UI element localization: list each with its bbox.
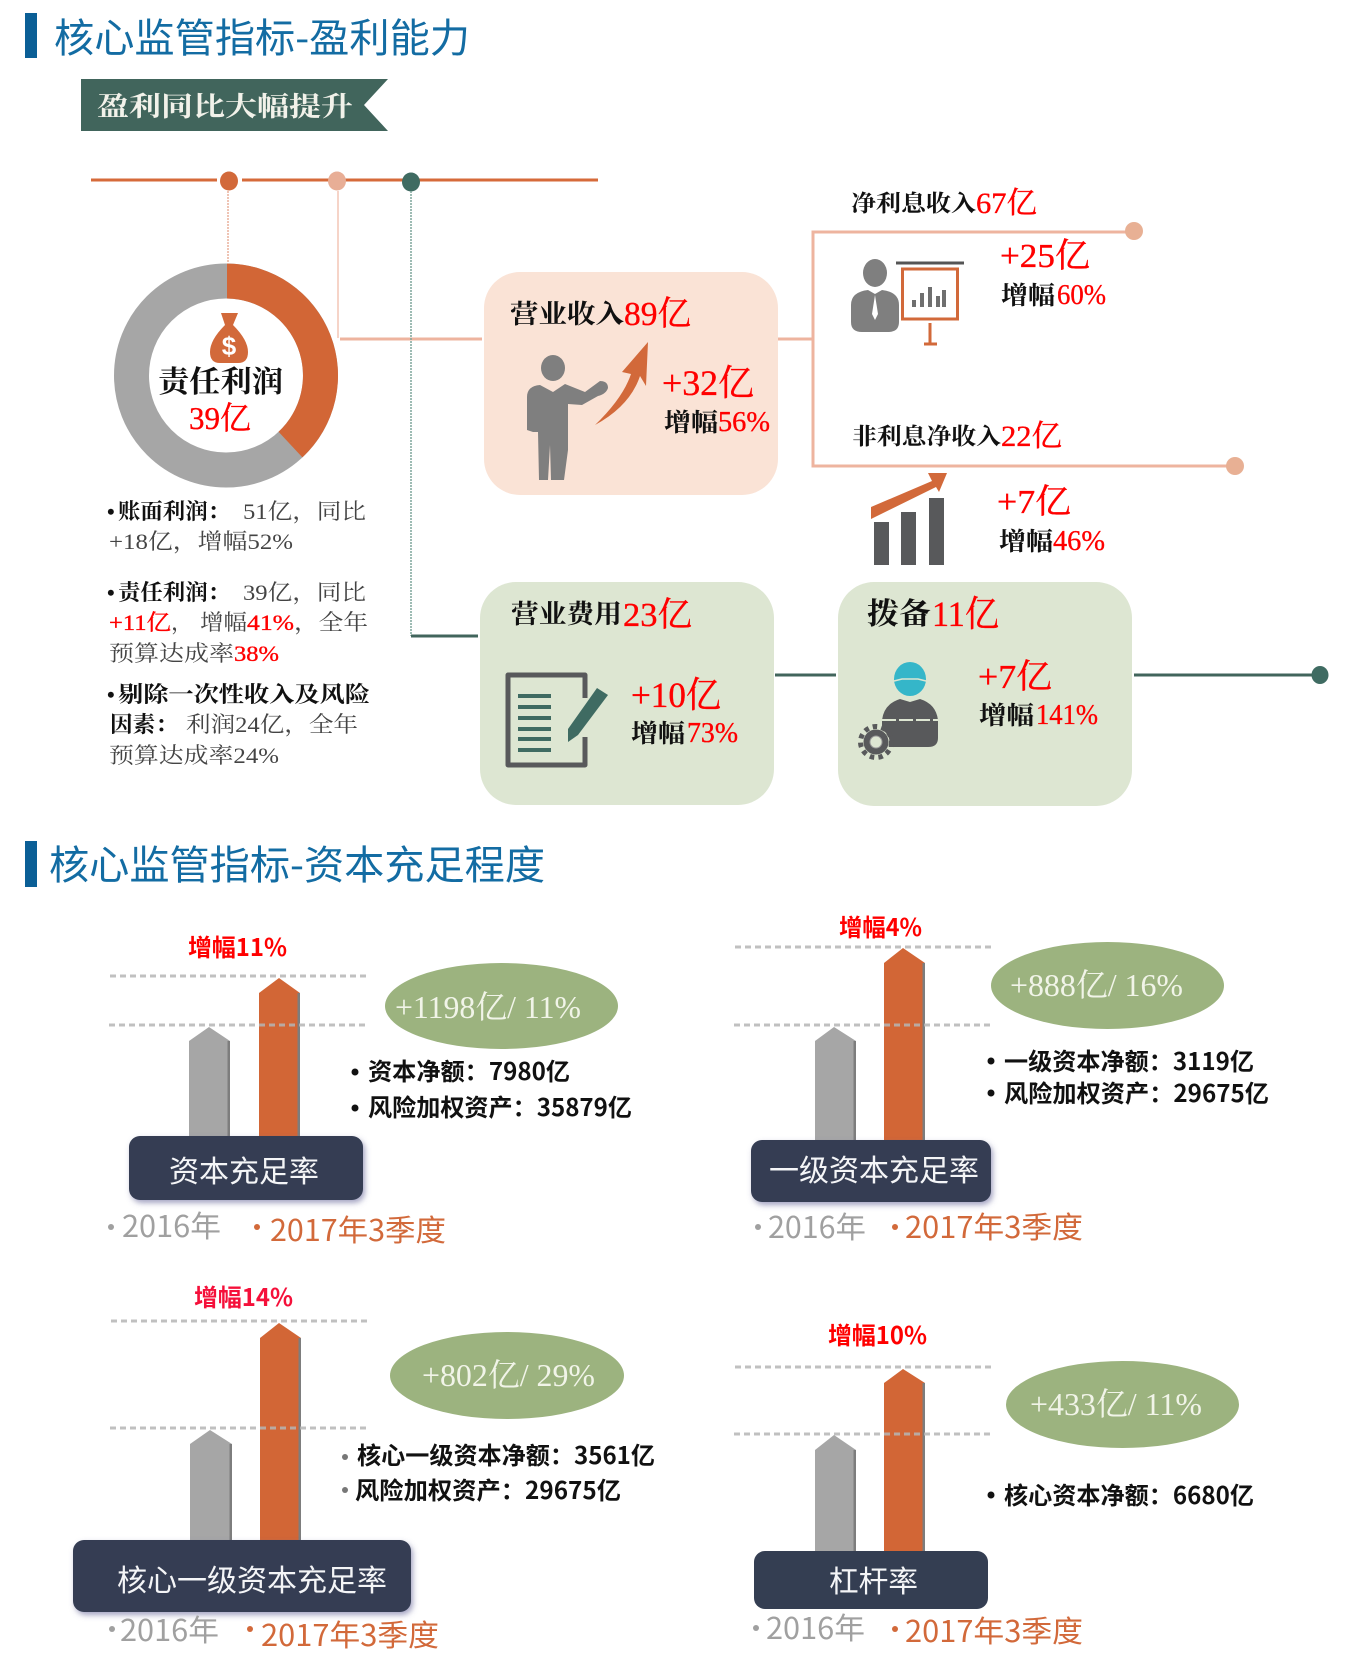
panel value: 23亿 <box>623 596 692 634</box>
icon: rising bars with arrow <box>871 473 947 565</box>
details: 核心一级资本净额：3561亿 <box>357 1436 655 1471</box>
block: net interest income <box>851 187 1106 344</box>
details <box>988 1042 1269 1109</box>
increase label: 增幅11% <box>188 928 287 963</box>
change percentage: 73% <box>687 718 738 749</box>
text block: profit notes: 预算达成率 <box>109 641 234 666</box>
chart: core tier 1 capital adequacy ratio <box>73 1278 655 1655</box>
change amount: +25亿 <box>1000 237 1090 275</box>
block: net interest income: 净利息收入 <box>851 190 976 216</box>
panel title: 拨备 <box>867 598 931 631</box>
ratio name box: 资本充足率 <box>169 1147 319 1191</box>
panel value: 89亿 <box>624 295 691 333</box>
change percentage <box>664 407 770 438</box>
ratio name box <box>129 1136 363 1200</box>
bar: 2017 Q3 <box>884 948 925 1140</box>
legend <box>753 1604 1083 1651</box>
change percentage <box>979 700 1098 731</box>
change percentage: 增幅 <box>999 528 1053 556</box>
banner: profit rises sharply: 盈利同比大幅提升 <box>97 91 353 122</box>
details <box>342 1436 655 1506</box>
change percentage: 增幅 <box>664 409 718 437</box>
text block: profit notes: • <box>107 499 115 524</box>
icon: money bag: $ <box>222 331 237 361</box>
ratio name box <box>754 1551 988 1609</box>
panel value: 11亿 <box>932 594 999 634</box>
change amount: +10亿 <box>631 675 721 715</box>
change percentage <box>1001 280 1106 311</box>
text block: profit notes: 利润24亿，全年 <box>186 712 358 738</box>
change amount: +32亿 <box>662 363 754 403</box>
icon: money bag <box>210 313 248 363</box>
ratio name box: 一级资本充足率 <box>769 1146 979 1190</box>
block: non-interest net income <box>852 420 1105 565</box>
bar: 2017 Q3 <box>259 978 300 1136</box>
bar: 2017 Q3 <box>260 1323 301 1540</box>
icon: presenter with rising arrow <box>527 342 648 480</box>
branch connector: income split <box>778 222 1244 475</box>
connector with end node <box>1134 666 1328 684</box>
legend: 2017年3季度 <box>261 1611 439 1655</box>
change percentage <box>999 526 1105 557</box>
donut value: 39亿 <box>189 400 251 436</box>
block: non-interest net income: 22亿 <box>1001 420 1062 453</box>
panel: operating income <box>484 272 778 495</box>
change percentage: 增幅 <box>1001 282 1055 310</box>
ratio name box: 核心一级资本充足率 <box>117 1556 387 1600</box>
change ellipse: +1198亿/ 11% <box>395 989 581 1025</box>
details <box>352 1052 632 1123</box>
bar: 2017 Q3 <box>884 1369 925 1551</box>
bar: 2016 <box>815 1027 856 1140</box>
details: 一级资本净额：3119亿 <box>1004 1042 1254 1077</box>
change amount: +7亿 <box>997 483 1071 521</box>
timeline with three nodes <box>91 172 598 192</box>
details: 资本净额：7980亿 <box>368 1052 570 1087</box>
heading: capital adequacy: 核心监管指标-资本充足程度 <box>49 833 545 891</box>
icon: document and pen <box>508 675 608 765</box>
details: 风险加权资产：29675亿 <box>355 1471 621 1506</box>
change percentage: 增幅 <box>979 702 1034 730</box>
change amount: +7亿 <box>978 658 1052 696</box>
bar: 2016 <box>190 1430 232 1540</box>
text block: profit notes: 责任利润： <box>118 580 230 605</box>
increase label: 增幅14% <box>194 1278 293 1313</box>
text block: profit notes: • <box>107 682 115 707</box>
icon: presenter with chart board <box>851 259 964 344</box>
donut label: 责任利润 <box>158 366 283 399</box>
change ellipse <box>385 963 618 1049</box>
text block: profit notes: 预算达成率24% <box>109 743 279 768</box>
block: non-interest net income: 非利息净收入 <box>852 423 1001 449</box>
legend: 2016年 <box>766 1604 865 1648</box>
block: net interest income: 67亿 <box>976 187 1037 220</box>
details: 风险加权资产：29675亿 <box>1004 1074 1269 1109</box>
legend: 2017年3季度 <box>270 1206 446 1250</box>
text block: profit notes: • <box>107 580 115 605</box>
change ellipse <box>1006 1361 1239 1448</box>
change percentage: 56% <box>718 407 770 438</box>
text block: profit notes: 因素： <box>110 712 178 737</box>
panel title: 营业收入 <box>510 300 624 329</box>
bar: 2016 <box>815 1435 856 1551</box>
change percentage: 46% <box>1053 526 1105 557</box>
heading: profitability: 核心监管指标-盈利能力 <box>54 6 470 64</box>
increase label: 增幅10% <box>828 1316 927 1351</box>
ratio name box <box>73 1540 411 1612</box>
text block: profit notes: 增幅 <box>200 610 247 635</box>
text block: profit notes: ， <box>171 610 193 636</box>
details: 核心资本净额：6680亿 <box>1004 1476 1254 1511</box>
change ellipse: +802亿/ 29% <box>422 1357 595 1393</box>
text block: profit notes: 剔除一次性收入及风险 <box>118 682 370 707</box>
connector: expenses to provisions <box>775 674 836 676</box>
text block: profit notes: 41% <box>247 610 294 635</box>
donut chart: responsibility profit <box>132 264 338 470</box>
change ellipse: +433亿/ 11% <box>1030 1386 1202 1422</box>
legend: 2017年3季度 <box>905 1607 1083 1651</box>
change percentage: 141% <box>1036 700 1098 731</box>
text block: profit notes: ，全年 <box>294 610 368 636</box>
text block: profit notes: +18亿，增幅52% <box>109 529 293 555</box>
ratio name box <box>751 1140 991 1202</box>
text block: profit notes: +11亿 <box>109 610 171 635</box>
legend: 2017年3季度 <box>905 1203 1083 1247</box>
banner: profit rises sharply <box>81 79 388 131</box>
legend: 2016年 <box>120 1606 219 1650</box>
details: 风险加权资产：35879亿 <box>368 1088 632 1123</box>
increase label: 增幅4% <box>839 908 922 943</box>
panel: operating expenses <box>480 582 774 805</box>
legend <box>109 1606 439 1655</box>
chart: tier 1 capital adequacy ratio <box>734 908 1269 1247</box>
text block: profit notes: 账面利润： <box>118 499 230 524</box>
legend <box>755 1203 1083 1247</box>
chart: leverage ratio <box>734 1316 1254 1651</box>
change ellipse <box>991 942 1224 1029</box>
text block: profit notes: 51亿，同比 <box>243 499 366 525</box>
bar: 2016 <box>189 1027 230 1136</box>
legend: 2016年 <box>768 1203 866 1247</box>
connector lines from timeline <box>228 191 482 636</box>
chart: capital adequacy ratio <box>108 928 632 1250</box>
icon: worker with gear <box>860 662 938 758</box>
change ellipse <box>390 1332 624 1419</box>
change percentage: 增幅 <box>631 720 685 748</box>
text block: profit notes: 39亿，同比 <box>243 580 366 606</box>
text block: profit notes <box>107 499 370 768</box>
panel title: 营业费用 <box>511 600 622 629</box>
text block: profit notes: 38% <box>234 641 279 666</box>
panel: provisions <box>838 582 1132 806</box>
legend <box>108 1202 446 1250</box>
change percentage <box>631 718 738 749</box>
change percentage: 60% <box>1057 280 1106 311</box>
legend: 2016年 <box>122 1202 221 1246</box>
ratio name box: 杠杆率 <box>829 1557 918 1601</box>
change ellipse: +888亿/ 16% <box>1010 967 1183 1003</box>
